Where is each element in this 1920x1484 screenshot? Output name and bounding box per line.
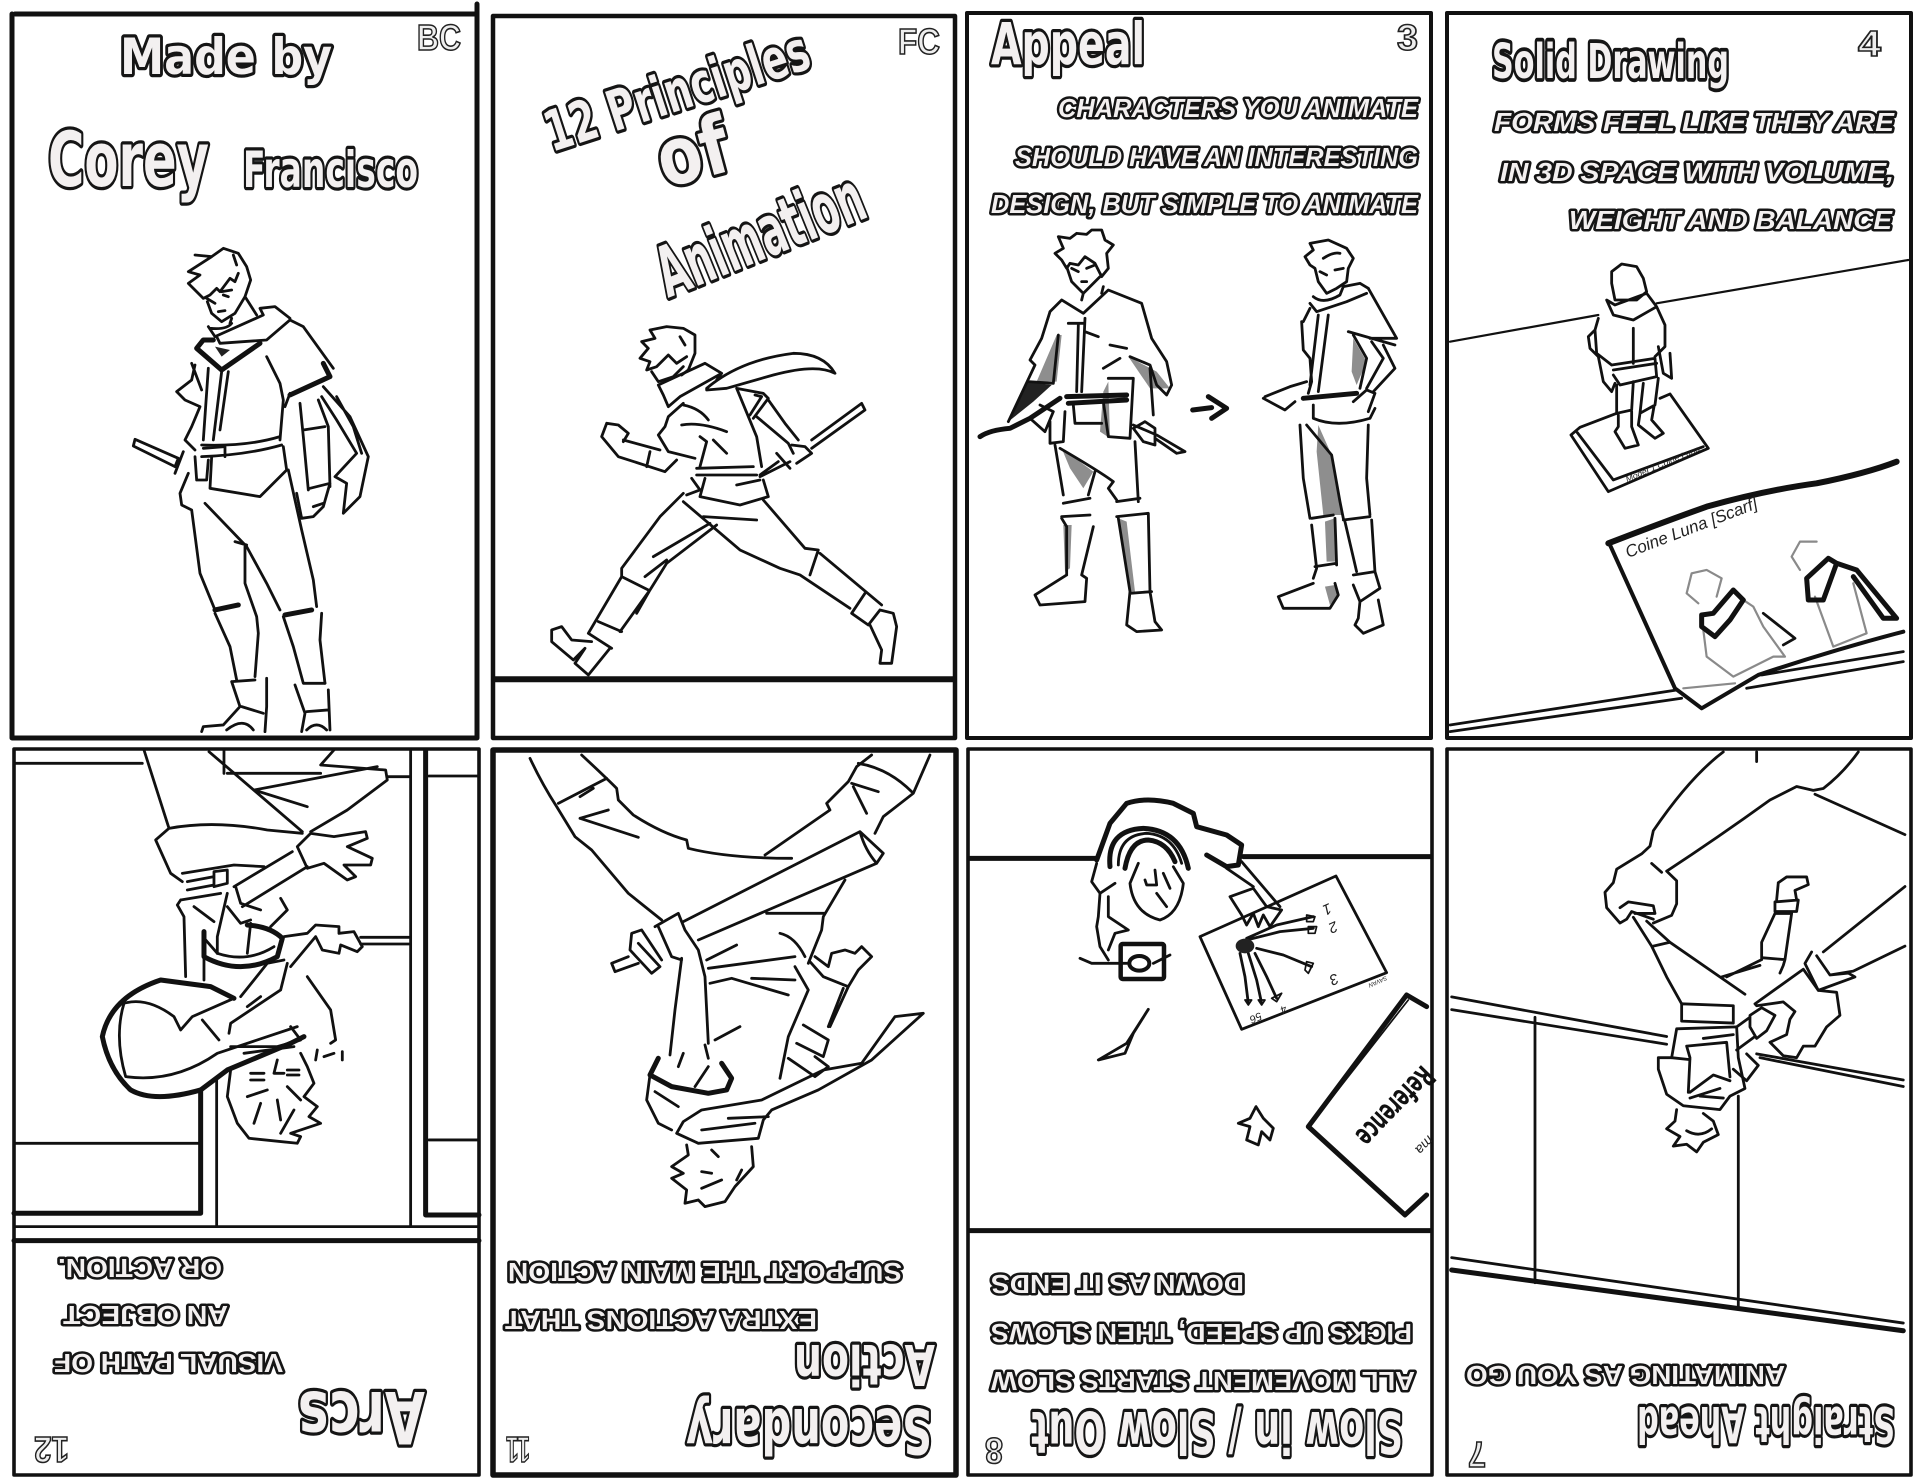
sheet step numbers: 56 (1247, 1009, 1264, 1026)
sheet step numbers: SAVAN (1367, 974, 1388, 988)
body text: solid drawing definition: FORMS FEEL LIKE THEY ARE (1494, 107, 1895, 137)
plinth caption: Model 1 Coine Luna (1624, 444, 1702, 484)
title: of: of (646, 98, 740, 206)
page number 8: 8 (985, 1430, 1003, 1471)
upside-down character holding sword (530, 755, 930, 1207)
character standing with sword (133, 248, 368, 732)
body text: slow in slow out definition: ALL MOVEMENT STARTS SLOW (991, 1366, 1415, 1396)
body text: arcs definition: OR ACTION. (58, 1253, 222, 1283)
panel frame (968, 749, 1432, 1475)
body text: slow in slow out definition: DOWN AS IT ENDS (991, 1269, 1244, 1299)
title: Animation: Animation (644, 156, 876, 314)
page number 3: 3 (1397, 17, 1418, 58)
character running with sword (494, 327, 954, 679)
page number 12: 12 (34, 1429, 69, 1470)
sheet step numbers: 3 (1326, 969, 1341, 989)
heading: Slow in / Slow Out: Slow in / Slow Out (1031, 1398, 1403, 1466)
body text: solid drawing definition: IN 3D SPACE WITH VOLUME, (1500, 157, 1894, 187)
panel frame (967, 13, 1431, 738)
book title Reference: Reference (1348, 1058, 1441, 1153)
page label FC: FC (898, 21, 940, 62)
title: Francisco: Francisco (243, 141, 418, 199)
body text: appeal definition: SHOULD HAVE AN INTERESTING (1015, 142, 1418, 172)
panel: Slow in / Slow Out (8) upside down (968, 749, 1441, 1475)
title: Made by: Made by (120, 28, 332, 86)
heading: Secondary: Secondary (686, 1394, 932, 1467)
panel: Secondary Action (11) upside down (493, 750, 956, 1475)
sheet step numbers: 4 (1278, 1002, 1289, 1016)
body text: secondary action definition (505, 1257, 902, 1335)
body text: arcs definition (54, 1253, 283, 1378)
body text: secondary action definition: EXTRA ACTIONS THAT (505, 1305, 817, 1335)
body text: appeal definition (991, 93, 1419, 219)
book subtitle fragment: ma (1412, 1133, 1437, 1158)
panel frame (493, 16, 955, 738)
panel: back cover (BC) (12, 4, 477, 738)
body text: appeal definition: DESIGN, BUT SIMPLE TO ANIMATE (991, 189, 1419, 219)
panel frame (1447, 749, 1911, 1475)
page number 7: 7 (1468, 1434, 1486, 1475)
panel: Arcs (12) upside down (14, 749, 479, 1475)
panel: Appeal (3) (967, 10, 1431, 738)
panel frame (1447, 13, 1911, 738)
heading: Straight Ahead: Straight Ahead (1637, 1395, 1895, 1453)
heading: Appeal: Appeal (991, 10, 1145, 78)
panel: front cover (FC) (493, 16, 955, 738)
body text: slow in slow out definition (991, 1269, 1415, 1396)
body text: slow in slow out definition: PICKS UP SPEED, THEN SLOWS (991, 1318, 1412, 1348)
body text: solid drawing definition (1494, 107, 1895, 235)
panel frame (493, 750, 956, 1475)
window background and upside-down character with cape (14, 750, 479, 1241)
body text: straight ahead definition: ANIMATING AS YOU GO (1466, 1360, 1785, 1390)
panel frame (12, 4, 477, 738)
page number 11: 11 (506, 1429, 530, 1470)
two character designs with arrow (980, 230, 1397, 633)
body text: arcs definition: VISUAL PATH OF (54, 1348, 283, 1378)
upside-down desk scene with artist, reference sheet and book (970, 800, 1430, 1231)
railing, hands and small upside-down figure (1452, 752, 1905, 1331)
panel frame (14, 749, 479, 1475)
page number 4: 4 (1858, 23, 1881, 64)
body text: arcs definition: AN OBJECT (63, 1300, 228, 1330)
figure on plinth with floor and sketch page (1450, 260, 1908, 732)
title: Corey: Corey (48, 115, 209, 204)
heading: Solid Drawing: Solid Drawing (1492, 34, 1729, 90)
heading: Arcs: Arcs (298, 1375, 425, 1459)
body text: secondary action definition: SUPPORT THE MAIN ACTION (508, 1257, 902, 1287)
panel: Solid Drawing (4) (1447, 13, 1911, 738)
sketch page caption: Coine Luna [Scarf] (1623, 493, 1761, 562)
panel: Straight Ahead (7) upside down (1447, 749, 1911, 1475)
sheet step numbers: 1 (1320, 899, 1334, 918)
sheet step numbers: 2 (1325, 917, 1341, 937)
heading: Action: Action (794, 1331, 935, 1396)
body text: appeal definition: CHARACTERS YOU ANIMATE (1058, 93, 1419, 123)
page label BC: BC (417, 17, 461, 58)
sheet step numbers (1247, 899, 1388, 1026)
body text: solid drawing definition: WEIGHT AND BALANCE (1569, 205, 1893, 235)
